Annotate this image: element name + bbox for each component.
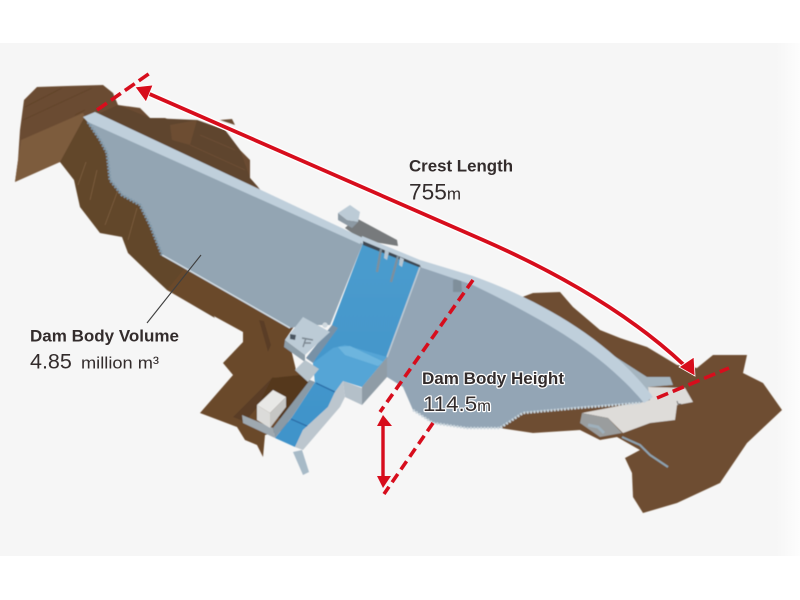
spillway water <box>275 241 421 447</box>
label: dam body volume: million m³ <box>81 354 159 372</box>
label: dam body volume: Dam Body Volume <box>30 328 179 346</box>
spillway walls <box>242 325 387 475</box>
dam height dashed extension lines <box>380 280 473 494</box>
label: crest length: Crest Length <box>409 158 513 176</box>
crest length dashed extension lines <box>97 73 729 398</box>
label: dam body height <box>422 370 565 416</box>
control building <box>284 317 330 382</box>
lower-centre rock <box>167 268 310 457</box>
label: crest length <box>409 158 513 204</box>
concrete apron <box>580 347 693 467</box>
label: crest length: 755m <box>409 180 461 204</box>
left rock hillside <box>15 85 300 318</box>
dam illustration <box>15 85 782 513</box>
left dam face <box>84 117 363 328</box>
label: dam body height: 114.5m <box>423 392 491 416</box>
dam height double arrow <box>377 415 392 488</box>
powerhouse block <box>257 390 286 428</box>
label: dam body height: Dam Body Height <box>422 370 565 388</box>
right dam face <box>387 267 650 428</box>
label: dam body volume: 4.85 <box>30 350 72 374</box>
right rock hillside <box>500 292 782 513</box>
crest road <box>83 112 653 403</box>
crest length arrow <box>135 85 695 376</box>
intake tower <box>338 205 398 246</box>
leader line: dam body volume <box>147 255 201 323</box>
label: dam body volume <box>30 328 179 374</box>
